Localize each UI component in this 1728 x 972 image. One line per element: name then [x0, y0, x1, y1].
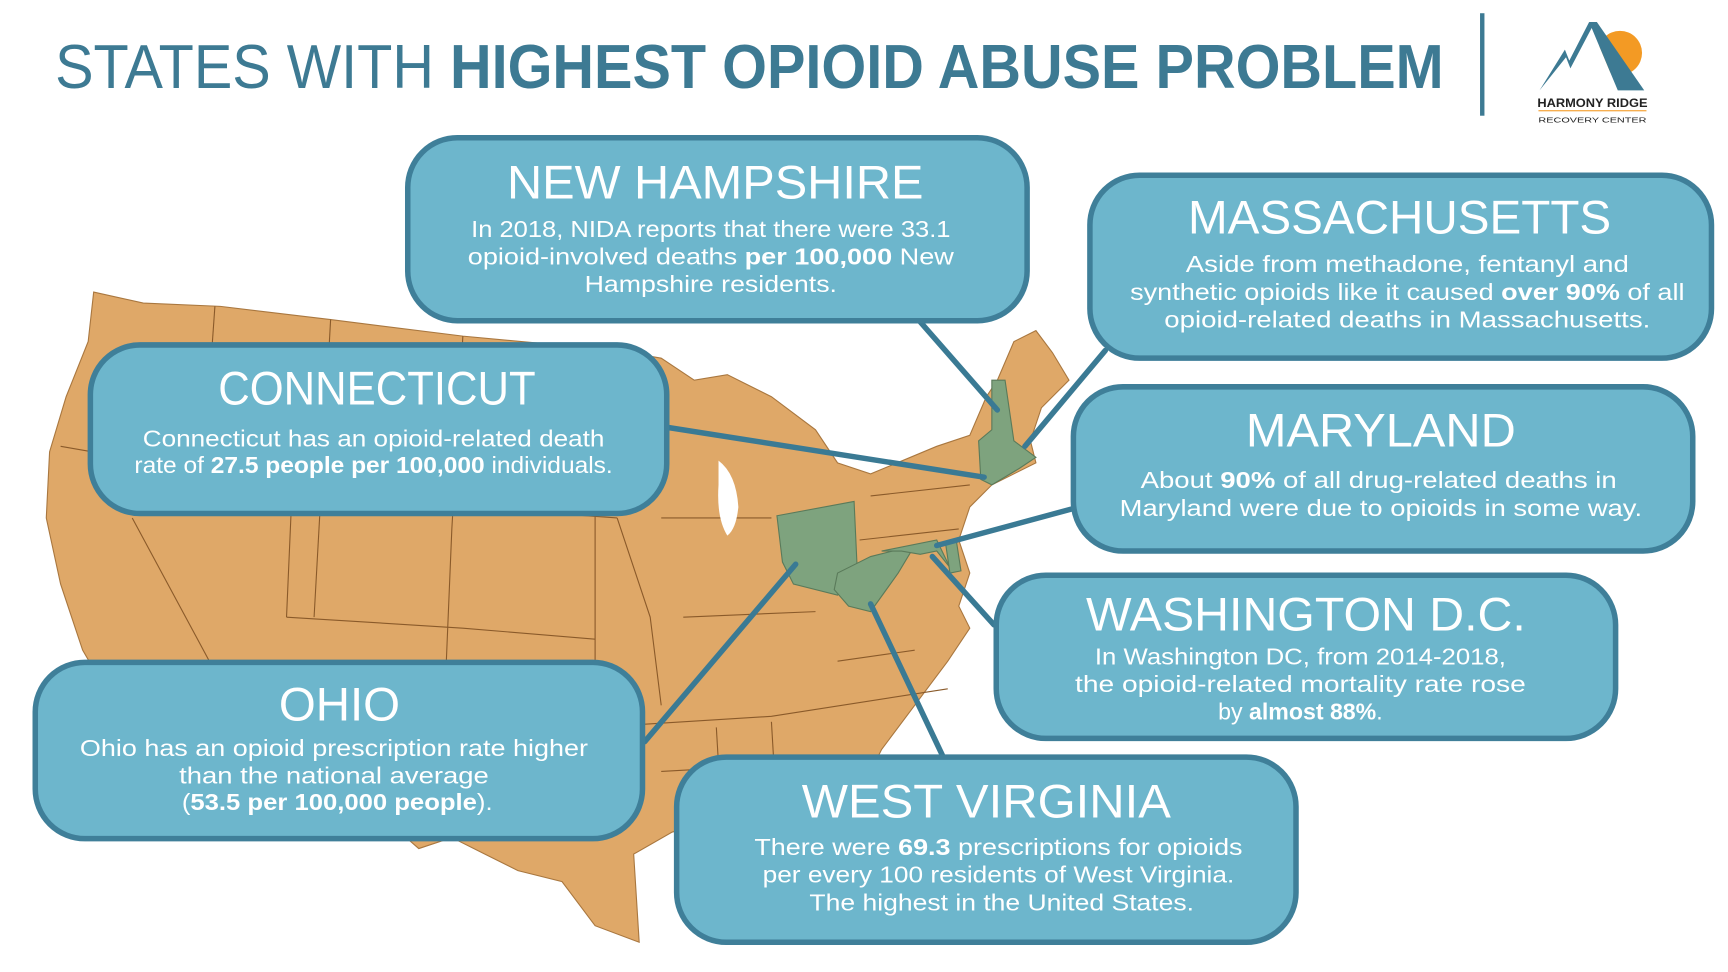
panel: ohio: (53.5 per 100,000 people ).	[182, 789, 493, 815]
logo	[1537, 22, 1648, 124]
panel: connecticut: Connecticut has an opioid-related death	[143, 425, 604, 451]
panel: west virginia: per every 100 residents of West Virginia.	[763, 862, 1234, 888]
panel: maryland: About 90% of all drug-related deaths in	[1141, 467, 1617, 493]
panel: washington dc: the opioid-related mortality rate rose	[1075, 671, 1526, 697]
panel: west virginia: WEST VIRGINIA	[802, 776, 1171, 829]
title: STATES WITH HIGHEST OPIOID ABUSE PROBLEM	[55, 33, 1444, 102]
panel: maryland: Maryland were due to opioids in some way.	[1120, 495, 1642, 521]
highlighted states	[777, 380, 1036, 612]
panel: west virginia: There were 69.3 prescriptions for opioids	[754, 834, 1243, 860]
panel: maryland: MARYLAND	[1246, 404, 1516, 457]
connector lines	[645, 322, 1105, 755]
panel: west virginia: The highest in the United States.	[809, 889, 1194, 915]
panel: maryland	[1073, 387, 1693, 551]
panel: washington dc: by almost 88%.	[1218, 699, 1383, 725]
panel: connecticut: rate of 27.5 people per 100,000 individuals.	[134, 452, 613, 478]
panel: ohio	[35, 662, 642, 839]
divider	[1480, 13, 1484, 116]
panel: massachusetts: opioid-related deaths in Massachusetts.	[1164, 306, 1650, 332]
panel: massachusetts: Aside from methadone, fentanyl and	[1186, 251, 1629, 277]
map: US	[46, 292, 1069, 942]
panel: washington dc	[996, 575, 1616, 738]
panel: west virginia	[677, 757, 1296, 942]
panel: connecticut	[90, 345, 667, 514]
logo: HARMONY RIDGE	[1537, 98, 1648, 110]
panel: new hampshire: opioid-involved deaths per 100,000 New	[468, 243, 954, 269]
panel: new hampshire	[408, 138, 1027, 321]
panel: new hampshire: NEW HAMPSHIRE	[507, 156, 924, 209]
panel: new hampshire: Hampshire residents.	[585, 271, 837, 297]
panel: massachusetts	[1090, 175, 1711, 358]
panel: washington dc: In Washington DC, from 2014-2018,	[1095, 644, 1506, 670]
panel: ohio: than the national average	[179, 763, 489, 789]
panel: massachusetts: synthetic opioids like it caused over 90% of all	[1130, 279, 1684, 305]
panel: ohio: OHIO	[279, 679, 400, 732]
logo: RECOVERY CENTER	[1538, 115, 1647, 124]
panel: massachusetts: MASSACHUSETTS	[1188, 192, 1611, 245]
panel: connecticut: CONNECTICUT	[218, 362, 536, 415]
lake michigan	[718, 461, 738, 536]
panel: ohio: Ohio has an opioid prescription rate higher	[80, 735, 588, 761]
panel: new hampshire: In 2018, NIDA reports that there were 33.1	[471, 216, 951, 242]
panel: washington dc: WASHINGTON D.C.	[1086, 588, 1526, 641]
